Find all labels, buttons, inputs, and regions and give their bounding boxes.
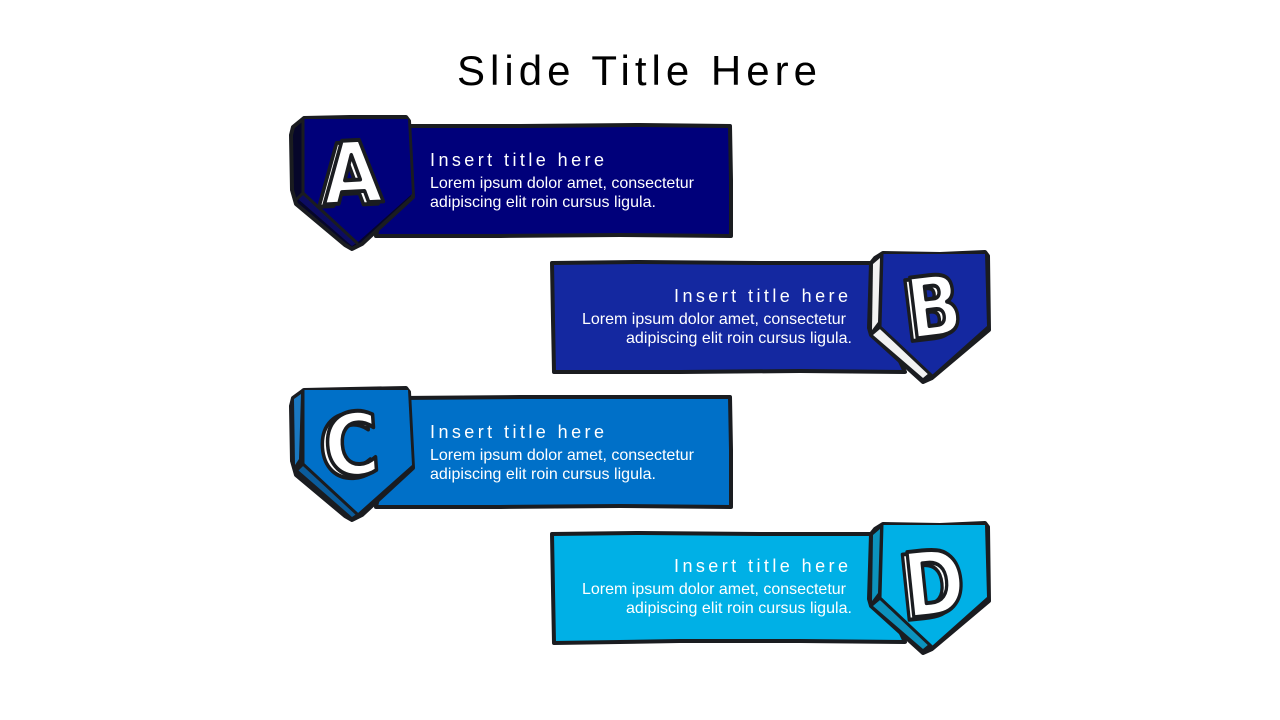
panel: B	[552, 252, 989, 382]
banner C text	[430, 422, 695, 483]
letter C: C	[315, 397, 378, 500]
banner A text	[430, 150, 695, 211]
letter C: C	[321, 395, 383, 498]
banner C text: Lorem ipsum dolor amet, consectetur	[430, 447, 695, 464]
banner C	[376, 397, 731, 507]
banner D text	[582, 556, 852, 617]
letter A: A	[314, 125, 380, 228]
letter D: D	[899, 530, 970, 640]
panel: C	[291, 388, 731, 520]
shield A	[291, 117, 413, 249]
banner D	[552, 533, 905, 643]
banner D text: Lorem ipsum dolor amet, consectetur	[582, 581, 847, 598]
banner C text: adipiscing elit roin cursus ligula.	[430, 466, 656, 483]
banner B text	[582, 286, 852, 347]
banner A text: Lorem ipsum dolor amet, consectetur	[430, 175, 695, 192]
banner B text: adipiscing elit roin cursus ligula.	[626, 330, 852, 347]
panel: D	[552, 523, 989, 653]
shield C	[291, 388, 413, 520]
letter B: B	[901, 257, 967, 359]
shield D	[869, 523, 989, 653]
banner B	[552, 262, 905, 372]
letter B: B	[897, 259, 962, 362]
title: Slide Title Here	[457, 47, 817, 94]
banner B text: Lorem ipsum dolor amet, consectetur	[582, 311, 847, 328]
banner A text: adipiscing elit roin cursus ligula.	[430, 194, 656, 211]
letter A: A	[320, 123, 385, 225]
banner B text: Insert title here	[674, 286, 848, 306]
banner A	[376, 125, 731, 236]
banner A text: Insert title here	[430, 150, 604, 170]
banner D text: adipiscing elit roin cursus ligula.	[626, 600, 852, 617]
banner D text: Insert title here	[674, 556, 848, 576]
shield B	[869, 252, 989, 382]
banner C text: Insert title here	[430, 422, 604, 442]
panel: A	[291, 117, 731, 249]
letter D: D	[894, 533, 966, 642]
